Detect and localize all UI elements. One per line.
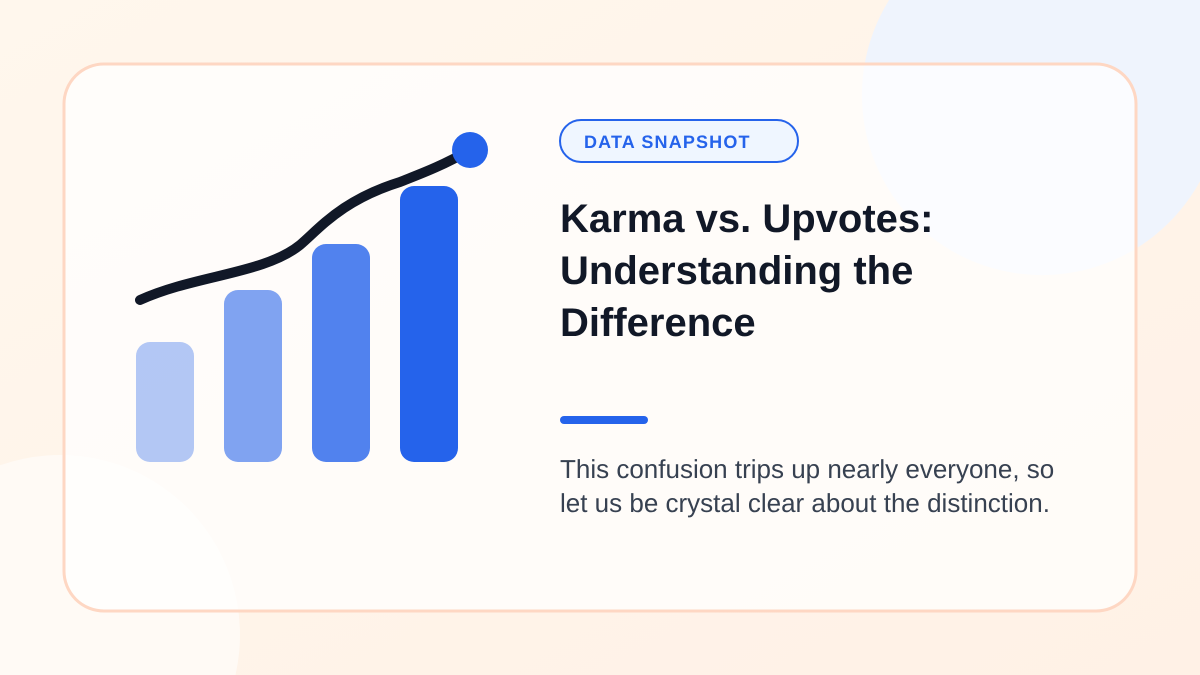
badge: data snapshot (560, 120, 798, 162)
accent bar (560, 416, 648, 424)
title: Difference (560, 301, 756, 345)
trend line (140, 150, 470, 300)
panel: main card (64, 64, 1136, 611)
bar 1 (136, 342, 194, 462)
bar 4 (400, 186, 458, 462)
bar 3 (312, 244, 370, 462)
body text: let us be crystal clear about the distinction. (560, 488, 1050, 518)
trend end point (452, 132, 488, 168)
badge: data snapshot: DATA SNAPSHOT (584, 132, 751, 152)
bar 2 (224, 290, 282, 462)
title: Karma vs. Upvotes: (560, 197, 933, 241)
bar chart with trend line (136, 132, 488, 462)
title: Understanding the (560, 249, 913, 293)
decorative circle: bottom left (0, 455, 240, 675)
body text: This confusion trips up nearly everyone, so (560, 454, 1054, 484)
decorative circle: top right (862, 0, 1200, 275)
